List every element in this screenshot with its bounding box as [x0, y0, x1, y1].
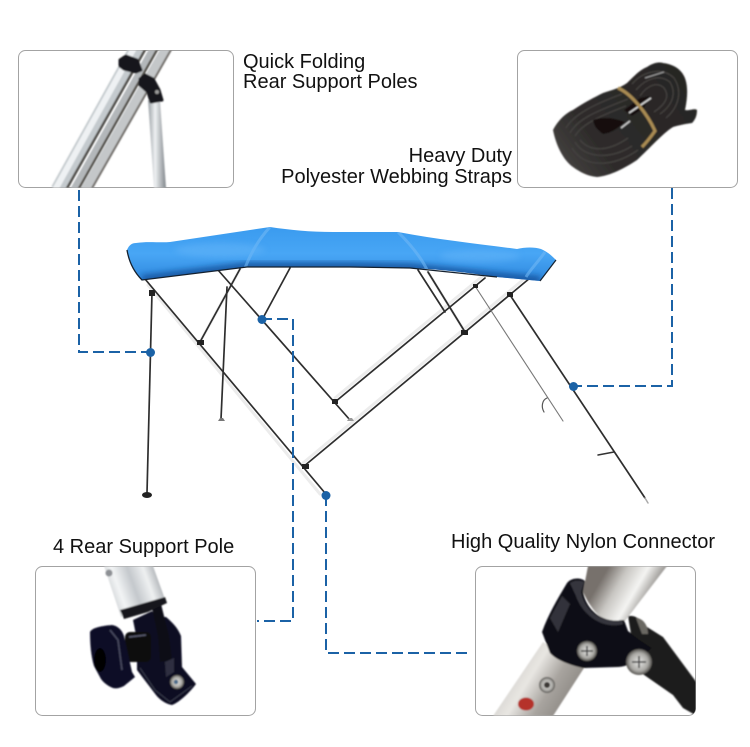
panel: nylon connector photo [476, 566, 697, 716]
label: 4 rear support pole: 4 Rear Support Pole [53, 536, 234, 558]
lower support pole [148, 100, 166, 188]
strap [628, 616, 697, 716]
label: quick folding rear support poles [243, 51, 418, 93]
label: heavy duty polyester webbing straps [281, 145, 512, 188]
callout dots [146, 315, 578, 500]
screw [170, 675, 184, 689]
lower tube [493, 642, 584, 716]
panel: polyester webbing straps photo [518, 50, 738, 188]
stem [152, 604, 172, 662]
label: quick folding rear support poles: Rear Support Poles [243, 71, 418, 93]
screws [577, 641, 597, 661]
knob [90, 625, 135, 688]
black clamp [542, 579, 652, 668]
tan band [618, 88, 655, 147]
panel: quick folding rear support poles photo [18, 48, 234, 190]
silver tubes [55, 48, 172, 190]
tube bolt [539, 677, 555, 693]
blue canopy [127, 227, 556, 281]
aluminium tube [104, 566, 166, 617]
black clamps [120, 56, 162, 102]
upper tube [583, 566, 667, 623]
frame [145, 268, 648, 503]
knob cylinder [125, 632, 151, 662]
label: quick folding rear support poles: Quick Folding [243, 51, 365, 73]
label: heavy duty polyester webbing straps: Polyester Webbing Straps [281, 166, 512, 188]
black collar [120, 597, 167, 619]
mounting bracket [133, 611, 196, 705]
label: heavy duty polyester webbing straps: Heavy Duty [409, 145, 512, 167]
inner gaps [593, 118, 625, 134]
red sticker [518, 698, 534, 710]
bimini top product [127, 227, 648, 503]
strap coil [553, 62, 697, 177]
frame joints and feet [142, 284, 513, 498]
panel: rear support pole mount photo [36, 566, 256, 716]
callout lines [79, 188, 672, 653]
label: high quality nylon connector: High Quality Nylon Connector [451, 531, 715, 553]
